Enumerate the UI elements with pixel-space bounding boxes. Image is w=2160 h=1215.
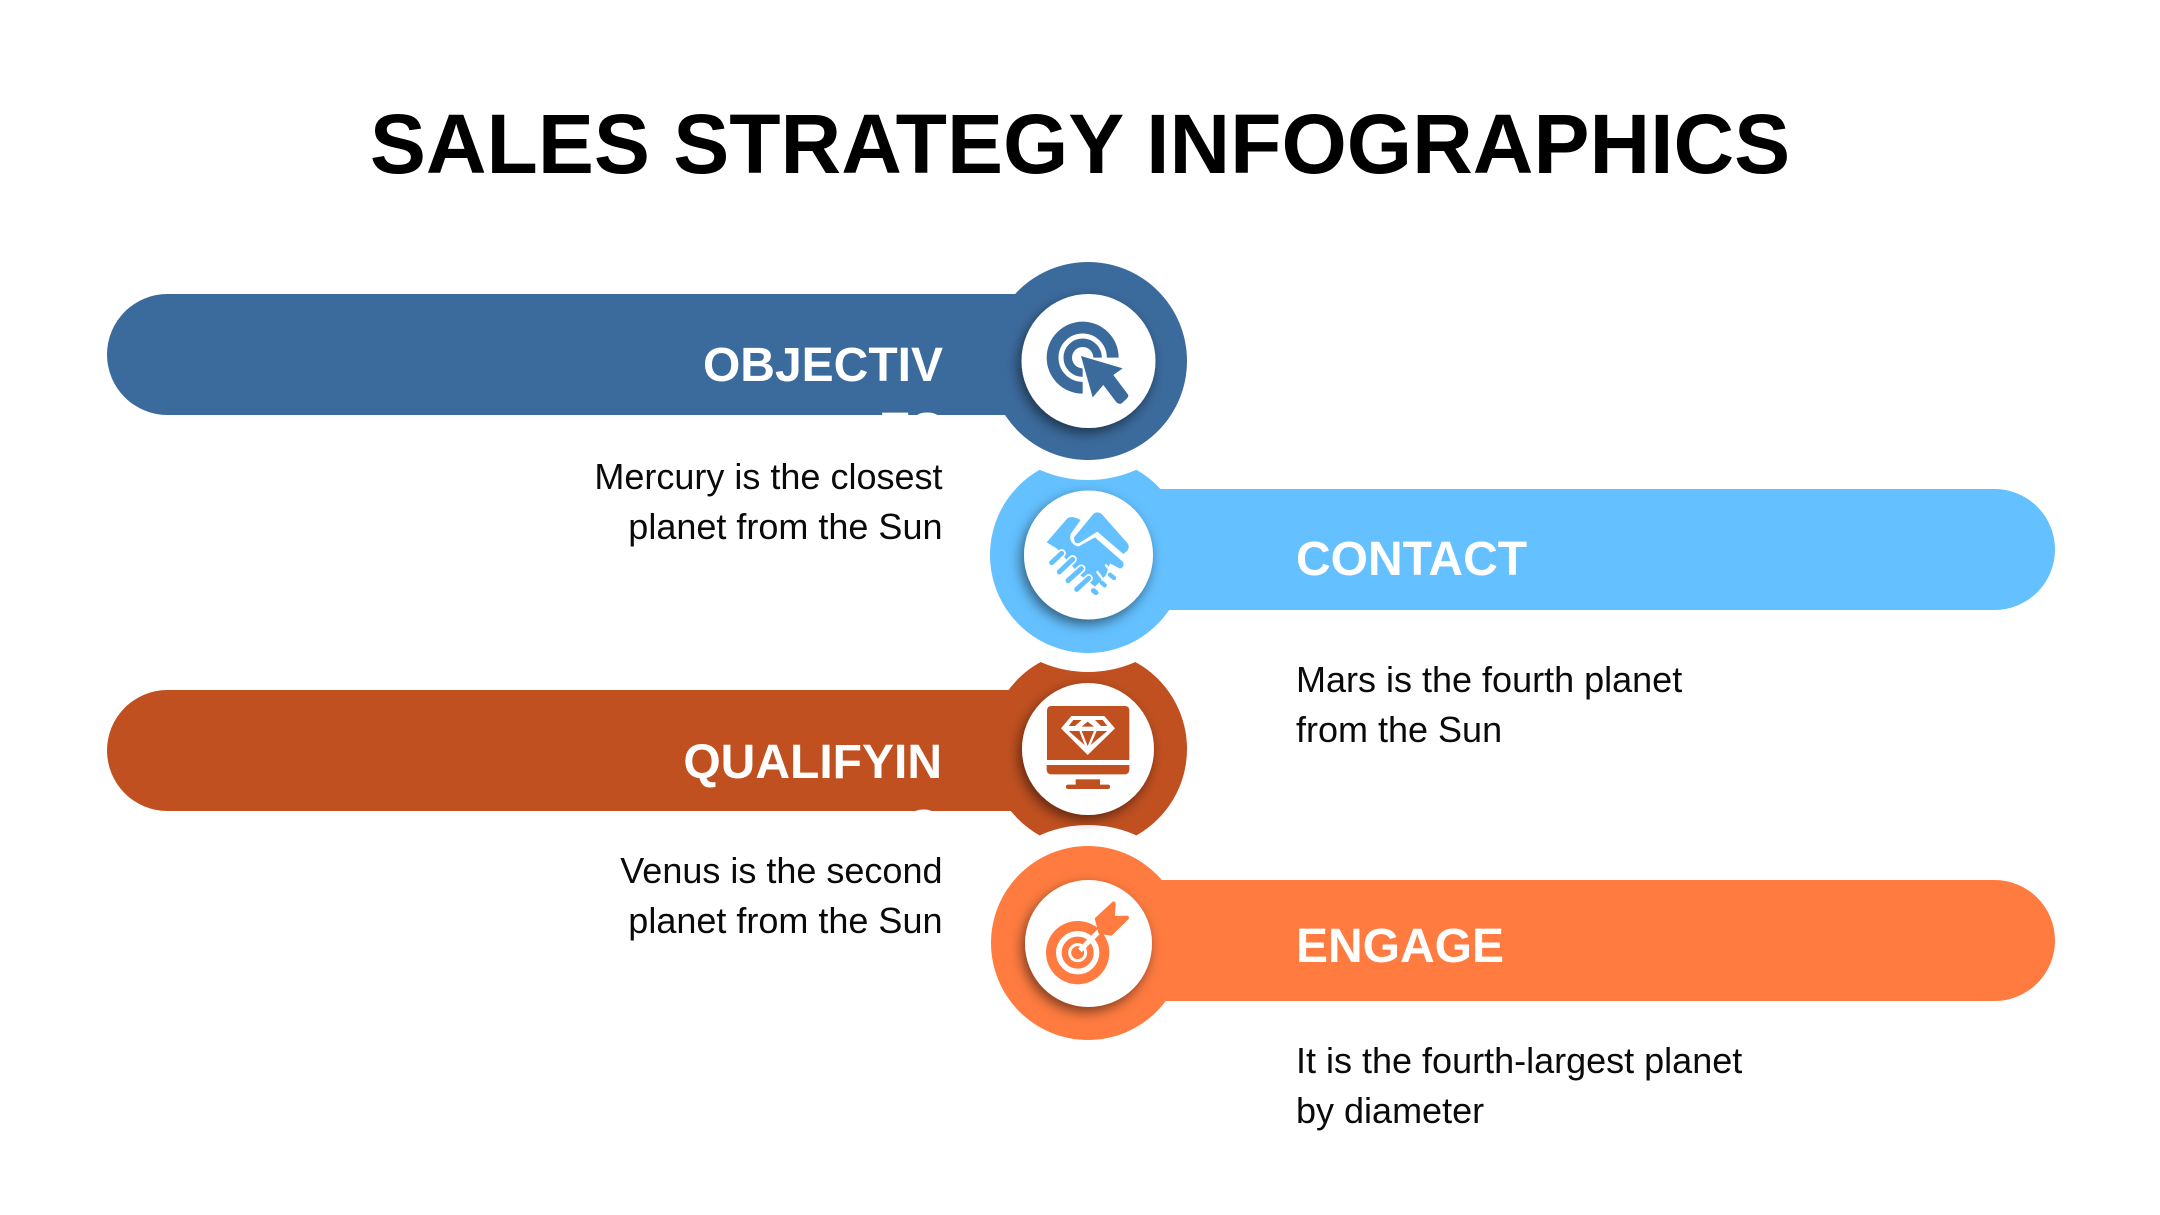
heading: objectives — [703, 339, 943, 457]
heading: qualifying: G — [905, 801, 942, 854]
icon: monitor with diamond — [1022, 683, 1154, 815]
text: mercury description: planet from the Sun — [628, 506, 942, 547]
icon: target with cursor — [1022, 294, 1156, 428]
heading: contact: CONTACT — [1296, 533, 1527, 586]
icon: handshake — [1024, 490, 1153, 620]
panel: objectives banner — [107, 242, 1207, 480]
text: fourth-largest description: It is the fourth-largest planet — [1296, 1040, 1742, 1081]
text: venus description: planet from the Sun — [628, 900, 942, 941]
panel: engage banner — [970, 825, 2055, 1061]
panel: qualifying banner — [107, 650, 1187, 848]
text: mercury description — [594, 456, 942, 547]
text: mars description: from the Sun — [1296, 709, 1502, 750]
heading: objectives: ES — [879, 404, 943, 457]
title: SALES STRATEGY INFOGRAPHICS — [370, 97, 1790, 191]
text: venus description — [620, 850, 942, 941]
panel: contact banner — [971, 438, 2055, 672]
heading: objectives: OBJECTIV — [703, 339, 943, 392]
text: mars description — [1296, 659, 1682, 750]
text: venus description: Venus is the second — [620, 850, 942, 891]
heading: engage: ENGAGE — [1296, 920, 1504, 973]
heading: qualifying: QUALIFYIN — [683, 736, 942, 789]
text: fourth-largest description — [1296, 1040, 1742, 1131]
icon: dart target — [1025, 880, 1152, 1007]
heading: qualifying — [683, 736, 942, 854]
text: mars description: Mars is the fourth planet — [1296, 659, 1682, 700]
text: mercury description: Mercury is the closest — [594, 456, 942, 497]
text: fourth-largest description: by diameter — [1296, 1090, 1484, 1131]
